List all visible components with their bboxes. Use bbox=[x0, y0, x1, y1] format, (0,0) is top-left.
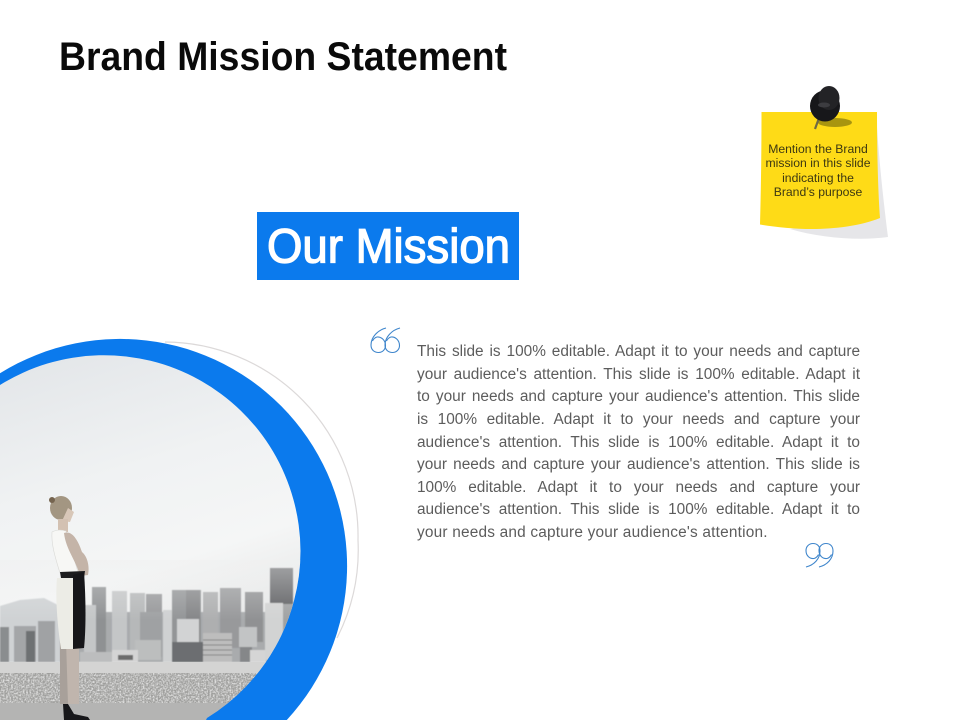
mission body text: your needs and capture your audience's attention. This slide is bbox=[417, 456, 860, 473]
mission body text: is 100% editable. Adapt it to your needs and capture your bbox=[417, 411, 860, 428]
mission body text: your audience's attention. This slide is 100% editable. Adapt it bbox=[417, 366, 860, 383]
woman figure bbox=[49, 496, 90, 720]
sticky note shadow bbox=[790, 128, 888, 239]
title: Brand Mission Statement bbox=[59, 35, 507, 79]
mission body text: This slide is 100% editable. Adapt it to your needs and capture bbox=[417, 343, 860, 360]
mission body text: 100% editable. Adapt it to your needs and capture your bbox=[417, 479, 860, 496]
skyline buildings bbox=[0, 568, 293, 662]
sticky note text: mission in this slide bbox=[766, 156, 870, 170]
push pin bbox=[810, 86, 852, 129]
sticky note text: indicating the bbox=[782, 171, 854, 185]
closing quote mark bbox=[806, 544, 833, 567]
sticky note text bbox=[766, 142, 870, 199]
photo: woman looking at city skyline bbox=[0, 354, 302, 720]
mission body text: your needs and capture your audience's attention. bbox=[417, 524, 768, 541]
mission body text: audience's attention. This slide is 100% editable. Adapt it to bbox=[417, 434, 860, 451]
thin grey arc behind blue circle bbox=[165, 342, 358, 638]
sticky note text: Mention the Brand bbox=[768, 142, 868, 156]
concrete wall and floor bbox=[0, 662, 266, 673]
mission body text: audience's attention. This slide is 100% editable. Adapt it to bbox=[417, 501, 860, 518]
our mission banner: Our Mission bbox=[267, 220, 510, 274]
sticky note text: Brand’s purpose bbox=[774, 185, 862, 199]
mission body text: to your needs and capture your audience's attention. This slide bbox=[417, 388, 860, 405]
opening quote mark bbox=[371, 328, 400, 352]
blue circle ring bbox=[0, 339, 347, 720]
yellow sticky note bbox=[760, 112, 880, 229]
mission body text bbox=[417, 343, 860, 541]
